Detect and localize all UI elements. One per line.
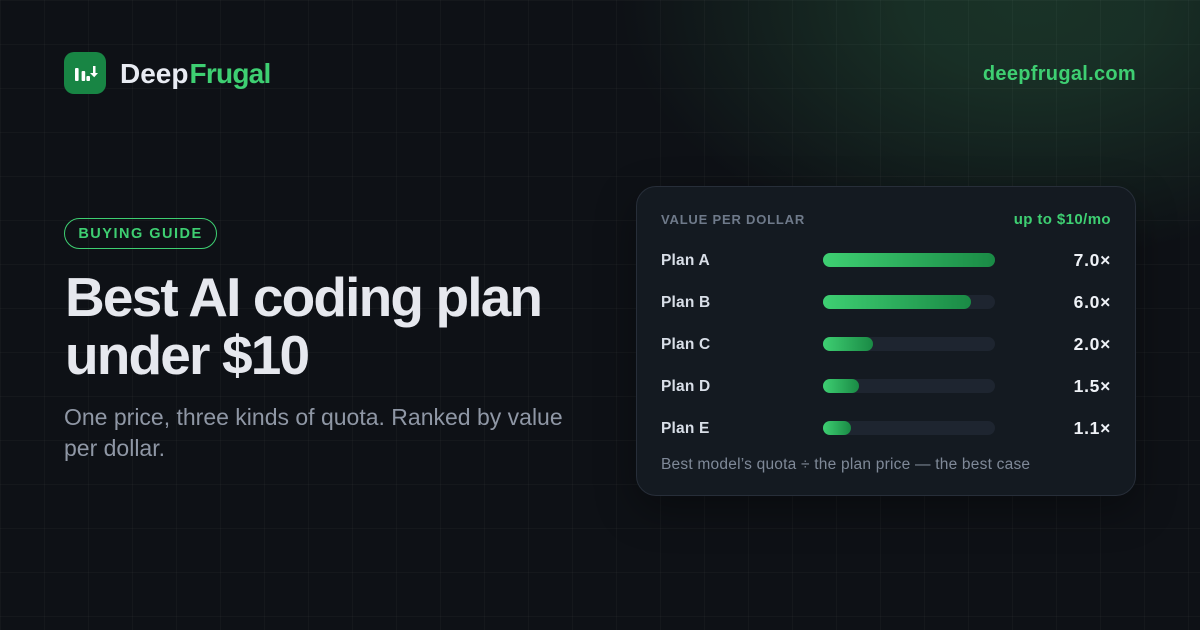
- bar: Plan B: [823, 295, 995, 309]
- label: Plan E: Plan E: [661, 420, 710, 437]
- title: under $10: [65, 324, 308, 386]
- panel tag: up to $10/mo: [1014, 211, 1111, 228]
- badge: buying guide: BUYING GUIDE: [78, 226, 203, 242]
- bar: Plan D: [823, 379, 995, 393]
- bar: Plan A: [823, 253, 995, 267]
- panel heading: VALUE PER DOLLAR: [661, 212, 805, 227]
- label: Plan D: Plan D: [661, 378, 710, 395]
- label: Plan A: Plan A: [661, 252, 710, 269]
- value: Plan C: 2.0×: [1074, 334, 1111, 354]
- panel: value per dollar: [636, 186, 1136, 496]
- badge: buying guide: [64, 218, 217, 249]
- title: [65, 266, 541, 386]
- subtitle: [64, 404, 563, 461]
- label: Plan B: Plan B: [661, 294, 710, 311]
- footnote: Best model’s quota ÷ the plan price — the best case: [661, 456, 1030, 473]
- brand name: DeepFrugal: [120, 58, 271, 89]
- bar: Plan E: [823, 421, 995, 435]
- logo icon: [64, 52, 106, 94]
- site url: deepfrugal.com: [983, 63, 1136, 85]
- value: Plan E: 1.1×: [1074, 418, 1111, 438]
- subtitle: One price, three kinds of quota. Ranked by value: [64, 404, 563, 430]
- value: Plan D: 1.5×: [1074, 376, 1111, 396]
- value: Plan A: 7.0×: [1074, 250, 1111, 270]
- bar: Plan C: [823, 337, 995, 351]
- label: Plan C: Plan C: [661, 336, 710, 353]
- title: Best AI coding plan: [65, 266, 541, 328]
- value: Plan B: 6.0×: [1074, 292, 1111, 312]
- subtitle: per dollar.: [64, 435, 165, 461]
